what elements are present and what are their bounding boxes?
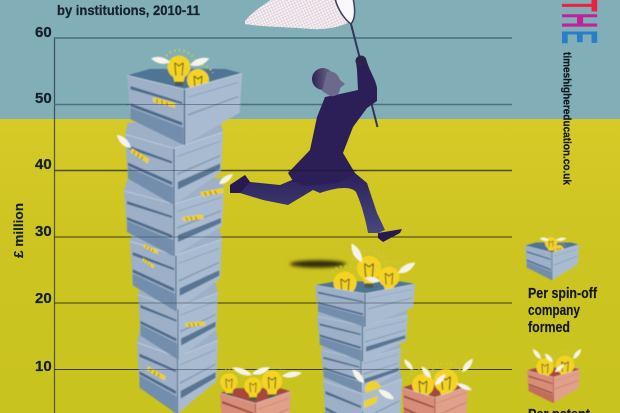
- chart axis and gridlines: [54, 37, 512, 413]
- patent bar: first red crate with bulbs: [217, 366, 302, 413]
- y axis labels: 40: [35, 156, 52, 173]
- legend: spin-off company crate icon: [525, 234, 579, 280]
- legend: patent crate icon: [527, 348, 583, 403]
- subtitle: by institutions, 2010-11: [57, 3, 200, 18]
- legend: spin-off company label: company: [528, 303, 580, 319]
- logo: THE: H: [550, 13, 606, 28]
- illustration: leaping man: [230, 56, 402, 242]
- legend: spin-off company label: formed: [528, 320, 570, 336]
- spin-off bar: stack of blue crates: [114, 50, 242, 413]
- y axis labels: 10: [35, 358, 52, 375]
- y axis labels: 20: [35, 290, 52, 307]
- logo: THE: E: [550, 30, 606, 44]
- y axis title: £ million: [11, 203, 26, 258]
- y axis labels: [35, 24, 52, 375]
- shadow of the running figure: [290, 260, 346, 268]
- patent bar: second red crate with bulbs: [402, 358, 476, 413]
- y axis labels: 30: [35, 223, 52, 240]
- illustration: butterfly net: [245, 0, 378, 127]
- gridlines showing through crates and figure: [124, 104, 414, 370]
- spin-off bar: second stack of blue crates: [315, 242, 417, 413]
- y axis labels: 60: [35, 24, 52, 41]
- logo: THE: [550, 0, 606, 44]
- legend: spin-off company label: [528, 286, 597, 336]
- y axis labels: 50: [35, 90, 52, 107]
- website url: timeshighereducation.co.uk: [560, 52, 572, 186]
- legend: spin-off company label: Per spin-off: [528, 286, 597, 302]
